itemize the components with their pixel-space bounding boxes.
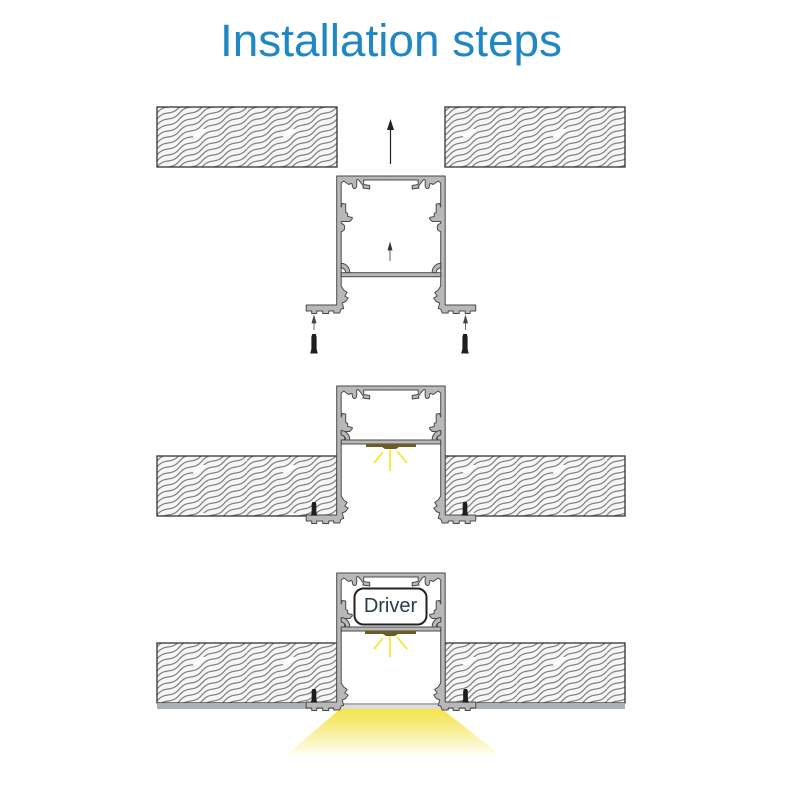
light rays (374, 636, 407, 657)
driver box (354, 588, 426, 624)
icon: right screw (462, 502, 468, 516)
left ceiling slab (157, 456, 337, 516)
diffuser (341, 705, 441, 709)
left ceiling slab (157, 643, 337, 703)
arrow: right screw up (464, 316, 468, 330)
panel: step 2 profile fixed with LED strip (157, 386, 625, 524)
icon: right screw (461, 334, 469, 354)
panel: step 3 finished install with driver (157, 573, 625, 757)
aluminium profile (306, 573, 476, 710)
light glow below fixture (284, 709, 503, 757)
icon: left screw (311, 689, 317, 703)
LED strip (366, 444, 416, 449)
arrow: up above profile (390, 128, 392, 164)
icon: left screw (311, 502, 317, 516)
light rays (374, 450, 407, 471)
right ceiling slab (445, 107, 625, 167)
aluminium profile (306, 386, 476, 524)
arrow: left screw up (312, 316, 316, 330)
aluminium profile (306, 176, 476, 314)
arrow: up inside profile (388, 243, 392, 261)
plaster layer (157, 703, 625, 709)
panel: step 1 mounting into ceiling gap (157, 107, 625, 354)
icon: right screw (462, 689, 469, 703)
left ceiling slab (157, 107, 337, 167)
icon: left screw (310, 334, 318, 354)
right ceiling slab (445, 456, 625, 516)
LED strip (365, 631, 416, 636)
title: Installation steps (220, 15, 562, 66)
arrow head: up above profile (387, 119, 394, 130)
right ceiling slab (445, 643, 625, 703)
driver box: Driver (364, 595, 417, 617)
